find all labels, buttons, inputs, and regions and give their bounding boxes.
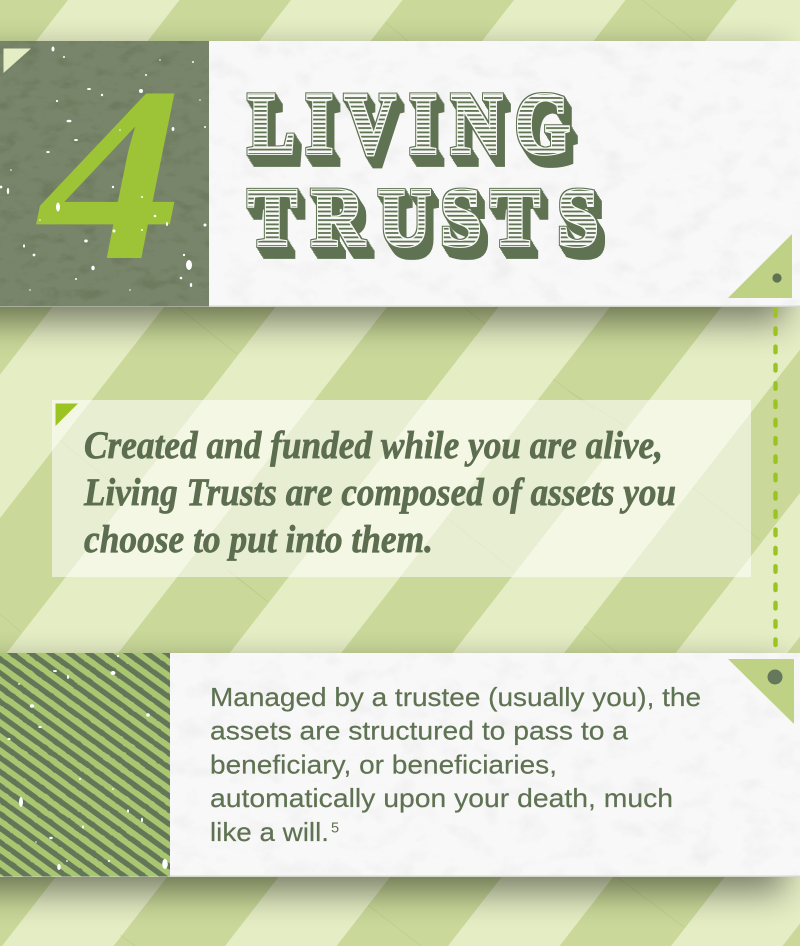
explanation text: 5: [331, 820, 339, 836]
explanation text: like a will.: [210, 817, 329, 847]
title paper background: [0, 41, 800, 307]
icon: green corner triangle: [56, 404, 78, 426]
number 4: 4: [36, 35, 183, 312]
title heading: TRUSTS: [248, 171, 598, 263]
intro text: [83, 424, 676, 561]
intro text: choose to put into them.: [84, 518, 433, 561]
intro text: Living Trusts are composed of assets you: [83, 471, 676, 514]
intro text: Created and funded while you are alive,: [84, 424, 663, 467]
dashed connector: [773, 310, 778, 652]
panel: trustee explanation: [0, 643, 800, 887]
callout: intro statement: [52, 400, 751, 577]
explanation text: beneficiary, or beneficiaries,: [210, 750, 557, 780]
title heading: [248, 76, 598, 263]
white speckles: [7, 655, 168, 870]
panel: title banner: [0, 35, 800, 312]
explanation text: assets are structured to pass to a: [210, 716, 629, 746]
explanation text: Managed by a trustee (usually you), the: [210, 682, 701, 712]
title heading: LIVING: [248, 76, 570, 173]
icon: fold triangle with dot: [728, 659, 794, 724]
explanation text: automatically upon your death, much: [210, 783, 673, 813]
diagonal stripe block: [0, 653, 170, 876]
icon: corner triangle: [4, 48, 31, 73]
panel: number block: [0, 35, 209, 312]
icon: fold triangle with dot: [728, 234, 792, 298]
explanation paper background: [0, 653, 800, 877]
white speckles: [0, 46, 206, 291]
explanation text: [210, 682, 701, 847]
